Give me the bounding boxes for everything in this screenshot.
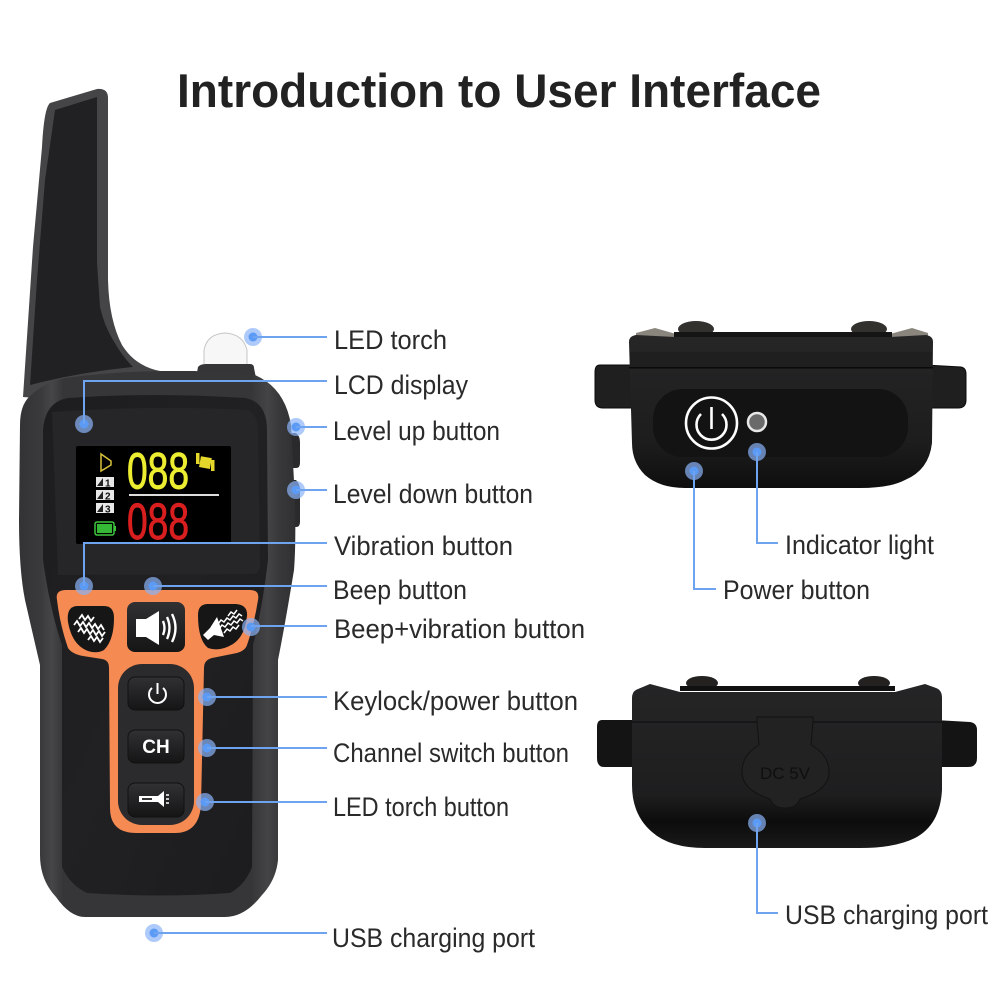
channel icons xyxy=(96,477,114,516)
callout: LED torch button: LED torch button xyxy=(333,792,509,822)
channel icons: 3 xyxy=(105,504,111,516)
callout: Indicator light xyxy=(748,443,934,560)
center strip xyxy=(674,332,892,337)
callout: LED torch: LED torch xyxy=(334,325,447,355)
callout: Channel switch button xyxy=(198,738,569,768)
callout: LED torch xyxy=(244,325,447,355)
callout: USB charging port on remote xyxy=(145,923,535,953)
side buttons xyxy=(290,433,300,527)
screws xyxy=(678,321,887,337)
signal icon xyxy=(196,453,214,471)
callout: Channel switch button: Channel switch button xyxy=(333,738,569,768)
power icon xyxy=(686,398,737,448)
body shell xyxy=(19,371,295,917)
callout: Vibration button: Vibration button xyxy=(334,531,513,561)
callout: Level down button: Level down button xyxy=(333,479,533,509)
collar ears xyxy=(595,365,966,408)
top rail xyxy=(680,686,895,691)
seam xyxy=(632,722,942,723)
LCD screen xyxy=(76,442,231,550)
channel icons: 1 xyxy=(105,478,111,490)
collar receiver front xyxy=(595,321,966,488)
channel button: CH xyxy=(142,737,170,758)
seam xyxy=(629,367,933,368)
speaker icon xyxy=(101,454,111,471)
battery icon xyxy=(95,522,116,535)
callout: LED torch button xyxy=(196,792,509,822)
DC 5V marking: DC 5V xyxy=(760,764,811,783)
callout: Beep+vibration button: Beep+vibration button xyxy=(334,614,585,644)
callout: Indicator light: Indicator light xyxy=(785,530,934,560)
callout: Level up button: Level up button xyxy=(333,416,500,446)
face plate xyxy=(43,395,268,896)
callout: USB charging port on collar xyxy=(748,814,988,930)
callout: Keylock/power button xyxy=(198,686,578,716)
glossy screen panel xyxy=(52,408,260,575)
ridged top band xyxy=(630,352,932,367)
vibration button xyxy=(68,606,114,652)
channel button xyxy=(128,730,184,763)
beep button xyxy=(127,602,185,652)
keylock power button xyxy=(128,677,184,710)
top rail xyxy=(636,328,928,337)
orange control plate xyxy=(57,590,258,833)
collar receiver back xyxy=(597,676,977,848)
LED torch bulb xyxy=(204,333,247,365)
antenna xyxy=(23,89,200,400)
yellow digits: 088 xyxy=(127,442,189,500)
lower button well xyxy=(118,664,194,825)
beep plus vibration button xyxy=(198,604,247,649)
callout: LCD display xyxy=(75,370,468,433)
antenna grip xyxy=(30,97,133,385)
vibration waves xyxy=(74,615,105,642)
callout: Beep button xyxy=(144,575,467,605)
torch base xyxy=(196,364,256,378)
callout: USB charging port on remote: USB charging port xyxy=(332,923,535,953)
callout: USB charging port on collar: USB charging port xyxy=(785,900,988,930)
indicator light xyxy=(748,413,766,431)
screws xyxy=(686,676,890,690)
callout: Power button xyxy=(685,462,870,605)
callout: LCD display: LCD display xyxy=(334,370,468,400)
callout: Power button: Power button xyxy=(723,575,870,605)
channel icons: 2 xyxy=(105,492,111,502)
torch button xyxy=(128,783,184,817)
remote transmitter xyxy=(19,89,300,917)
callout: Keylock/power button: Keylock/power button xyxy=(333,686,578,716)
red digits: 088 xyxy=(127,493,189,550)
housing xyxy=(629,335,933,488)
collar ears xyxy=(597,720,977,767)
title: Introduction to User Interface xyxy=(177,64,821,117)
divider xyxy=(129,494,219,496)
callout: Vibration button xyxy=(75,531,513,595)
housing xyxy=(632,684,942,848)
port cover xyxy=(742,717,829,808)
button panel xyxy=(653,389,908,457)
callout: Beep button: Beep button xyxy=(333,575,467,605)
